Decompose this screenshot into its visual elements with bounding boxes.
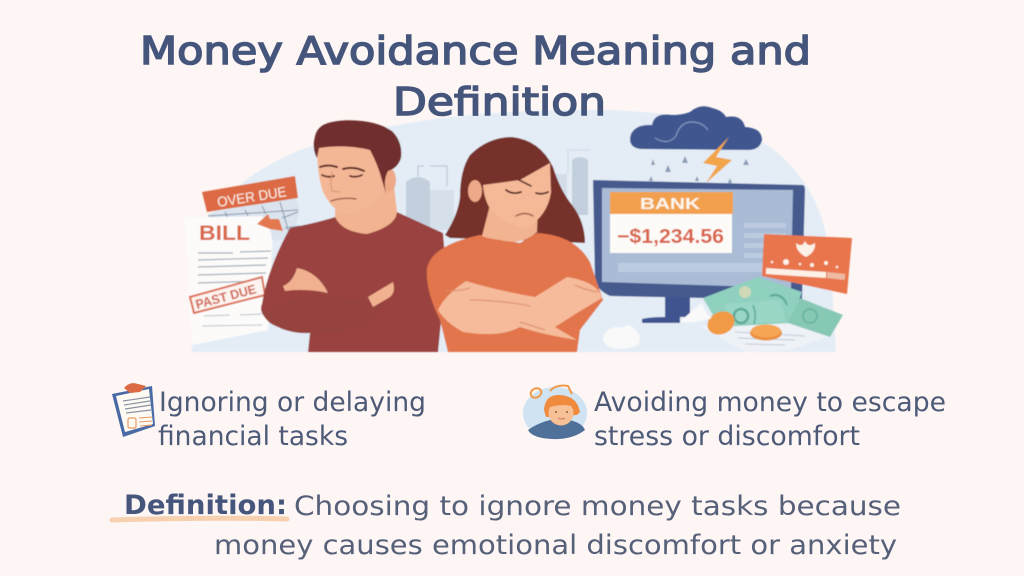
bill paper xyxy=(185,216,272,345)
past due stamp: PAST DUE xyxy=(194,281,258,312)
definition text: money causes emotional discomfort or anxiety xyxy=(214,530,897,561)
cash pile xyxy=(703,277,843,337)
coins xyxy=(704,307,782,340)
rain drops xyxy=(649,156,749,183)
skyline xyxy=(406,150,590,234)
bank balance card: BANK xyxy=(640,196,701,213)
icon: storm cloud xyxy=(630,106,762,183)
overdue bill xyxy=(185,176,300,345)
illustration backdrop xyxy=(190,110,836,352)
title: Money Avoidance Meaning and xyxy=(140,29,811,73)
face xyxy=(317,146,386,213)
shirt xyxy=(427,233,603,352)
bullet: ignoring or delaying xyxy=(158,387,426,452)
icon: clipboard checklist xyxy=(112,383,155,437)
bullet: ignoring or delaying: financial tasks xyxy=(158,421,348,452)
title xyxy=(140,29,811,124)
calendar grid xyxy=(208,196,300,240)
hair back xyxy=(445,137,585,243)
icon: stressed person xyxy=(523,386,587,439)
neck xyxy=(335,186,397,234)
arrow xyxy=(257,214,283,231)
bank balance card: −$1,234.56 xyxy=(617,226,724,248)
woman xyxy=(427,137,603,352)
tissue xyxy=(603,303,712,349)
bullet: ignoring or delaying: Ignoring or delaying xyxy=(159,387,426,418)
lightning bolt xyxy=(703,137,732,183)
crossed arms xyxy=(438,277,602,340)
monitor stand xyxy=(642,296,690,323)
definition text: Choosing to ignore money tasks because xyxy=(294,491,901,522)
paper under cash xyxy=(700,322,830,352)
facial features xyxy=(506,180,548,216)
crossed arms xyxy=(264,290,392,333)
orange credit card xyxy=(762,234,852,294)
bullet: avoiding money: Avoiding money to escape xyxy=(594,387,946,418)
facial features xyxy=(320,166,364,201)
bank monitor xyxy=(593,180,805,323)
title: Definition xyxy=(393,80,606,124)
overdue banner xyxy=(202,176,298,212)
man xyxy=(261,120,446,352)
illustration: couple avoiding finances xyxy=(185,106,852,352)
definition text xyxy=(124,490,901,561)
bullet: avoiding money: stress or discomfort xyxy=(594,421,860,452)
hair xyxy=(314,120,401,194)
face xyxy=(483,163,551,228)
ear xyxy=(468,180,482,202)
definition underline xyxy=(112,518,287,520)
ear xyxy=(382,168,396,192)
overdue banner: OVER DUE xyxy=(216,183,288,210)
bank balance card xyxy=(610,192,733,253)
definition text: Definition: xyxy=(124,490,287,521)
neck xyxy=(482,205,538,242)
BILL label: BILL xyxy=(199,222,250,245)
bullet: avoiding money xyxy=(594,387,946,452)
sweater xyxy=(261,212,446,352)
